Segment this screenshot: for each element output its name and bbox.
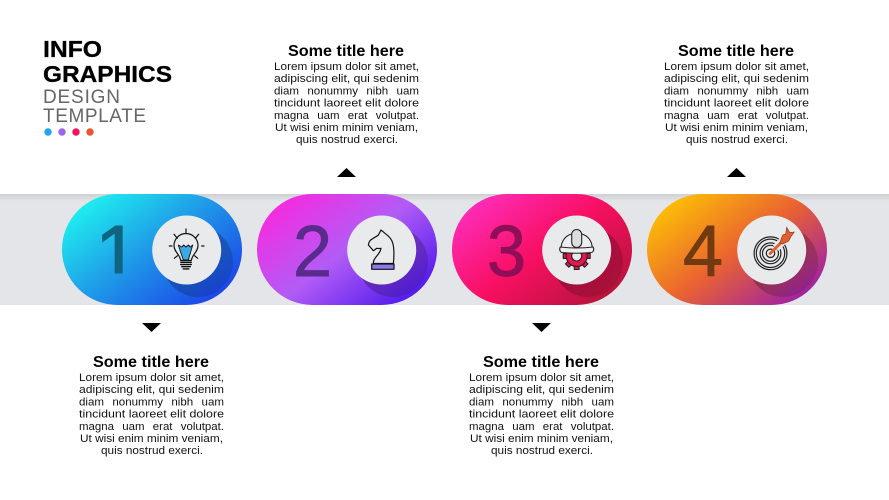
block body: Ut wisi enim minim veniam, bbox=[665, 122, 808, 134]
block body: tincidunt laoreet elit dolore bbox=[274, 98, 419, 110]
block body: Lorem ipsum dolor sit amet, bbox=[664, 61, 809, 73]
block body: adipiscing elit, qui sedenim bbox=[79, 384, 224, 396]
block title: Some title here bbox=[678, 43, 794, 60]
arrow: down 1 bbox=[142, 323, 161, 332]
block body: diam nonummy nibh uam bbox=[79, 396, 224, 408]
block body: Ut wisi enim minim veniam, bbox=[80, 433, 223, 445]
block body: magna uam erat volutpat. bbox=[79, 421, 224, 433]
block body: quis nostrud exerci. bbox=[101, 445, 203, 457]
block title: Some title here bbox=[93, 354, 209, 371]
block body: magna uam erat volutpat. bbox=[274, 110, 419, 122]
block body: diam nonummy nibh uam bbox=[664, 85, 809, 97]
number 1: 1 bbox=[95, 209, 140, 298]
block body: tincidunt laoreet elit dolore bbox=[79, 409, 224, 421]
text block: top right item bbox=[664, 43, 809, 146]
block body: magna uam erat volutpat. bbox=[664, 110, 809, 122]
icon: chess knight bbox=[368, 230, 394, 269]
number 4: 4 bbox=[683, 212, 723, 292]
subheading: design template: DESIGN bbox=[43, 87, 120, 108]
panel: step 4 bbox=[647, 194, 827, 305]
text block: bottom right item bbox=[469, 354, 614, 457]
panel: step 2 bbox=[257, 194, 437, 305]
arrow: down 3 bbox=[532, 323, 551, 332]
text block: bottom left item bbox=[79, 354, 224, 457]
arrow: up 4 bbox=[727, 168, 746, 177]
block body: quis nostrud exerci. bbox=[491, 445, 593, 457]
block body: Lorem ipsum dolor sit amet, bbox=[79, 372, 224, 384]
block body: quis nostrud exerci. bbox=[296, 134, 398, 146]
background band bbox=[0, 194, 889, 305]
title block bbox=[43, 36, 172, 136]
text block: top left item bbox=[274, 43, 419, 146]
block body: diam nonummy nibh uam bbox=[469, 396, 614, 408]
block body: adipiscing elit, qui sedenim bbox=[274, 73, 419, 85]
four coloured dots bbox=[44, 128, 94, 136]
block body bbox=[274, 61, 419, 146]
block body: Ut wisi enim minim veniam, bbox=[275, 122, 418, 134]
panel: step 3 bbox=[452, 194, 632, 305]
block body: Lorem ipsum dolor sit amet, bbox=[469, 372, 614, 384]
block body: Ut wisi enim minim veniam, bbox=[470, 433, 613, 445]
panel: step 1 bbox=[62, 194, 242, 305]
heading: infographics bbox=[43, 36, 172, 87]
block body bbox=[79, 372, 224, 457]
heading: infographics: GRAPHICS bbox=[43, 61, 172, 87]
block title: Some title here bbox=[288, 43, 404, 60]
block title: Some title here bbox=[483, 354, 599, 371]
icon: light bulb bbox=[169, 229, 204, 269]
heading: infographics: INFO bbox=[43, 36, 102, 62]
icon: helmet and gear bbox=[560, 230, 594, 270]
block body: adipiscing elit, qui sedenim bbox=[664, 73, 809, 85]
subheading: design template bbox=[43, 87, 146, 127]
block body: diam nonummy nibh uam bbox=[274, 85, 419, 97]
block body: magna uam erat volutpat. bbox=[469, 421, 614, 433]
icon: target with arrow bbox=[754, 227, 794, 270]
block body: Lorem ipsum dolor sit amet, bbox=[274, 61, 419, 73]
block body bbox=[664, 61, 809, 146]
subheading: design template: TEMPLATE bbox=[43, 106, 146, 127]
block body: adipiscing elit, qui sedenim bbox=[469, 384, 614, 396]
block body: tincidunt laoreet elit dolore bbox=[664, 98, 809, 110]
number 3: 3 bbox=[487, 212, 526, 292]
number 2: 2 bbox=[293, 212, 332, 292]
block body: tincidunt laoreet elit dolore bbox=[469, 409, 614, 421]
block body bbox=[469, 372, 614, 457]
block body: quis nostrud exerci. bbox=[686, 134, 788, 146]
arrow: up 2 bbox=[337, 168, 356, 177]
